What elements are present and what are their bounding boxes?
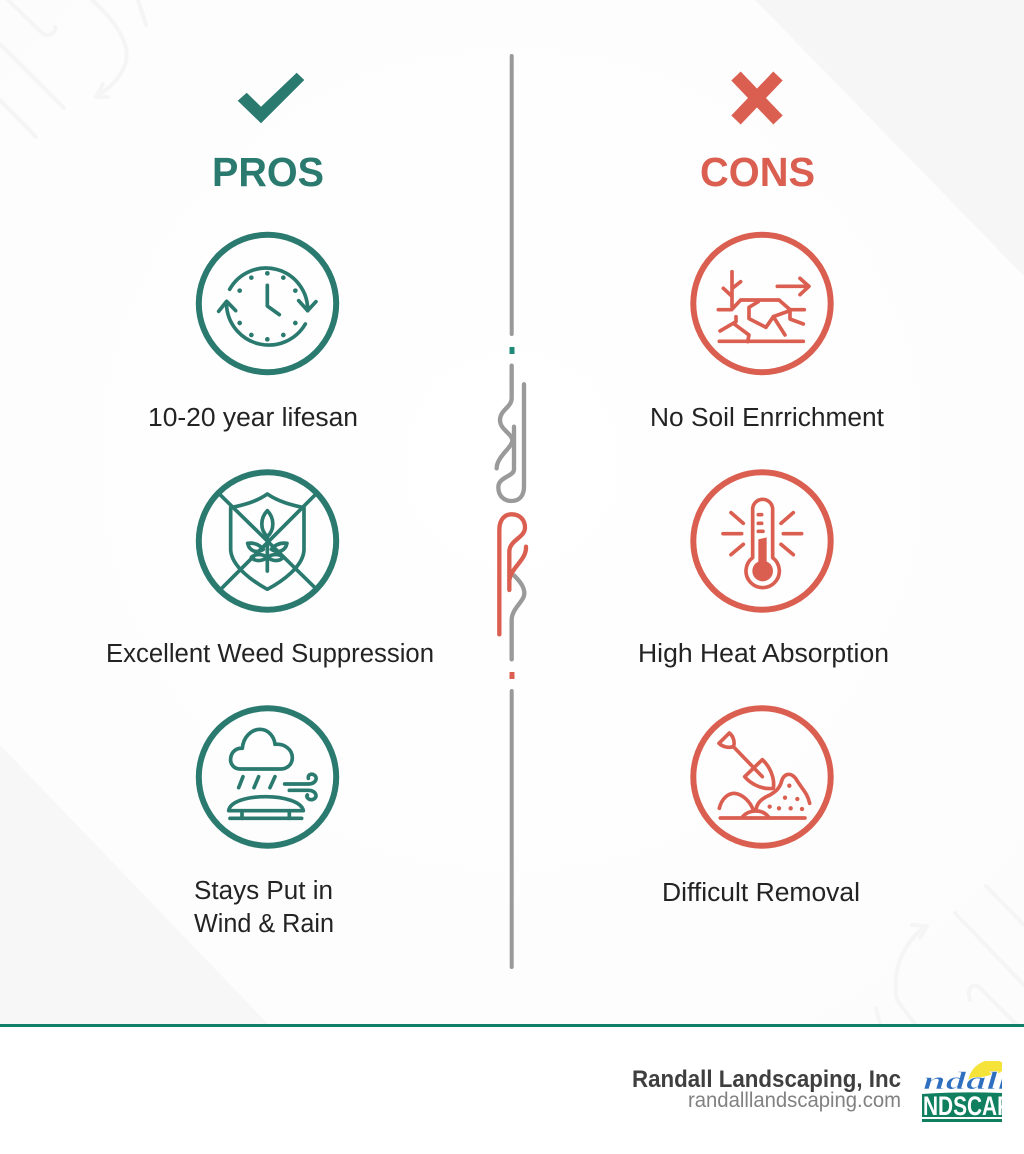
icon: x mark <box>736 76 778 120</box>
label: weed suppression: Excellent Weed Suppression <box>106 640 434 668</box>
pin: red lower clip <box>499 514 526 659</box>
footer company name: Randall Landscaping, Inc <box>632 1066 901 1093</box>
icon: cracked soil <box>693 235 831 372</box>
label: removal: Difficult Removal <box>662 879 860 907</box>
label: soil: No Soil Enrrichment <box>650 404 884 432</box>
logo <box>922 1061 1002 1122</box>
label: lifespan: 10-20 year lifesan <box>148 404 358 432</box>
pin: gray upper clip <box>497 366 524 501</box>
divider <box>497 56 524 501</box>
label: stays put <box>194 877 334 938</box>
icon: clock lifespan <box>199 235 336 372</box>
icon: weed shield <box>199 472 336 610</box>
label: heat: High Heat Absorption <box>638 640 889 668</box>
heading: pros: PROS <box>212 149 324 195</box>
icon: check mark <box>238 73 304 123</box>
heading: cons: CONS <box>700 149 815 195</box>
label: stays put: Wind & Rain <box>194 910 334 938</box>
footer <box>0 1024 1024 1154</box>
logo: ndall <box>923 1068 1009 1095</box>
icon: shovel <box>693 708 831 846</box>
divider lower <box>499 514 526 967</box>
footer website: randalllandscaping.com <box>688 1089 901 1112</box>
icon: wind and rain <box>199 708 336 846</box>
label: stays put: Stays Put in <box>194 877 333 905</box>
icon: thermometer <box>693 472 831 610</box>
